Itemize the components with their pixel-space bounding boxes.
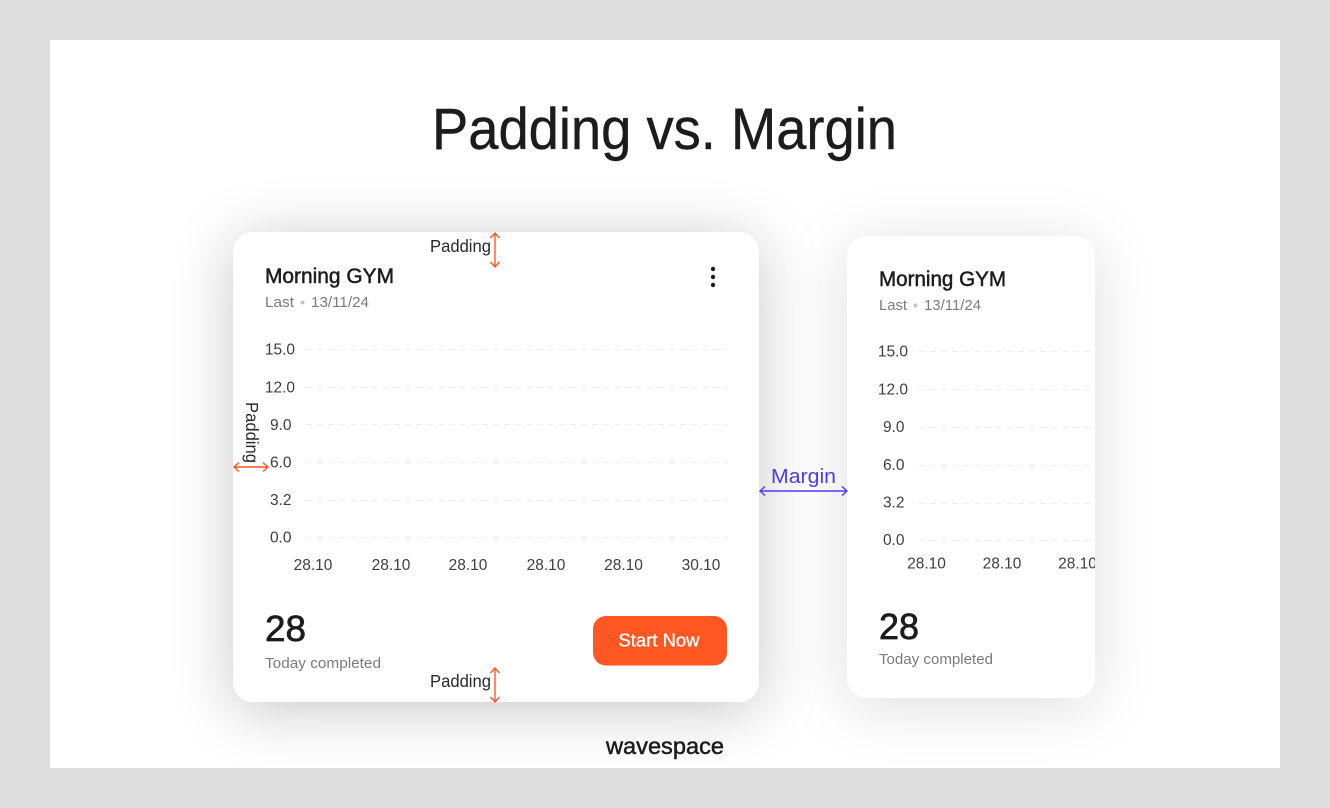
chart y axis labels: 15.0 [878,344,908,360]
panel: second card [847,236,1097,698]
card subtitle: Last [265,294,295,311]
chart y axis labels: 9.0 [270,417,292,434]
card heading: Morning GYM [879,268,1006,291]
annotation: top padding: Padding [430,236,491,256]
chart x axis labels: 28.10 [449,557,488,574]
chart x axis labels: 28.10 [604,557,643,574]
chart y axis labels: 0.0 [270,530,292,546]
annotation: bottom padding: Padding [430,671,491,691]
annotation: bottom padding [430,668,500,702]
card heading: Morning GYM [265,265,394,288]
chart x axis labels: 28.10 [527,557,566,574]
chart y axis labels: 9.0 [883,419,905,436]
chart grid [919,352,1095,540]
annotation: margin [760,466,847,496]
card subtitle: 13/11/24 [311,294,369,311]
chart x axis labels: 28.10 [372,557,411,574]
chart grid [306,350,727,538]
card subtitle: 13/11/24 [924,297,981,314]
annotation: left padding [234,402,268,472]
stat value: 28 [879,606,919,647]
icon: more menu [711,267,715,287]
annotation: top padding [430,233,500,267]
chart y axis labels: 6.0 [883,457,905,474]
chart x axis labels: 28.10 [1058,556,1097,572]
chart y axis labels [878,344,908,549]
button: start now [593,616,727,666]
chart y axis labels: 12.0 [265,380,295,396]
card subtitle [265,294,369,311]
card subtitle [880,299,981,310]
annotation: margin: Margin [771,466,836,488]
chart x axis labels [908,558,1095,568]
stat value: 28 [265,608,306,649]
chart y axis labels [265,342,295,546]
stat caption: Today completed [879,651,993,668]
chart y axis labels: 15.0 [265,342,295,358]
panel: card with padding [233,232,759,702]
stat caption: Today completed [265,655,381,672]
annotation: left padding: Padding [242,402,262,463]
chart x axis labels: 28.10 [983,556,1022,572]
chart y axis labels: 12.0 [878,382,908,398]
card subtitle: Last [879,297,908,314]
chart x axis labels [294,557,721,574]
chart y axis labels: 3.2 [270,492,292,509]
chart y axis labels: 3.2 [883,494,904,512]
logo: wavespace: wavespace [605,733,724,759]
chart x axis labels: 28.10 [907,556,946,572]
title: Padding vs. Margin [432,97,897,162]
button: start now: Start Now [618,630,701,650]
chart x axis labels: 28.10 [294,557,333,574]
chart y axis labels: 6.0 [270,454,292,472]
chart y axis labels: 0.0 [883,532,905,549]
chart x axis labels: 30.10 [682,557,721,574]
